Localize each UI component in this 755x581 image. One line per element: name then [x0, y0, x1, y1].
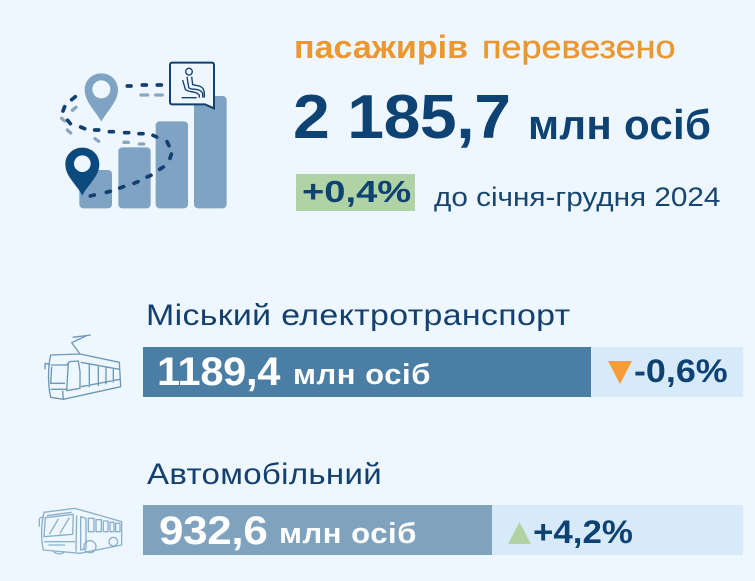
heading regular part: перевезено [482, 29, 676, 65]
bar unit: млн осіб [279, 518, 417, 550]
heading: passengers carried [294, 29, 676, 65]
icon: tram [44, 334, 122, 400]
total unit: млн осіб [528, 101, 711, 148]
heading bold part: пасажирів [294, 29, 468, 65]
bar number: 1189,4 [157, 350, 280, 394]
bar unit: млн осіб [293, 359, 431, 391]
comparison period: до січня-грудня 2024 [434, 182, 720, 212]
bar background [143, 347, 743, 397]
bar background [143, 505, 743, 555]
bar value [143, 505, 492, 555]
change value: -0,6% [634, 353, 728, 389]
change value: +4,2% [533, 514, 633, 550]
icon: bars with route and pins [60, 62, 227, 208]
down arrow [608, 361, 632, 384]
up arrow [508, 522, 531, 544]
icon: bus [38, 508, 122, 554]
total number: 2 185,7 [293, 83, 511, 152]
label: road transport: Автомобільний [147, 458, 382, 491]
bar value [143, 347, 591, 397]
change value: +0,4% [302, 174, 411, 209]
total value [293, 83, 711, 152]
panel: road transport [38, 458, 743, 555]
change badge [296, 174, 415, 211]
label: urban electric transport: Міський електротранспорт [146, 299, 570, 332]
bar number: 932,6 [159, 509, 267, 553]
panel: urban electric transport [44, 299, 743, 400]
